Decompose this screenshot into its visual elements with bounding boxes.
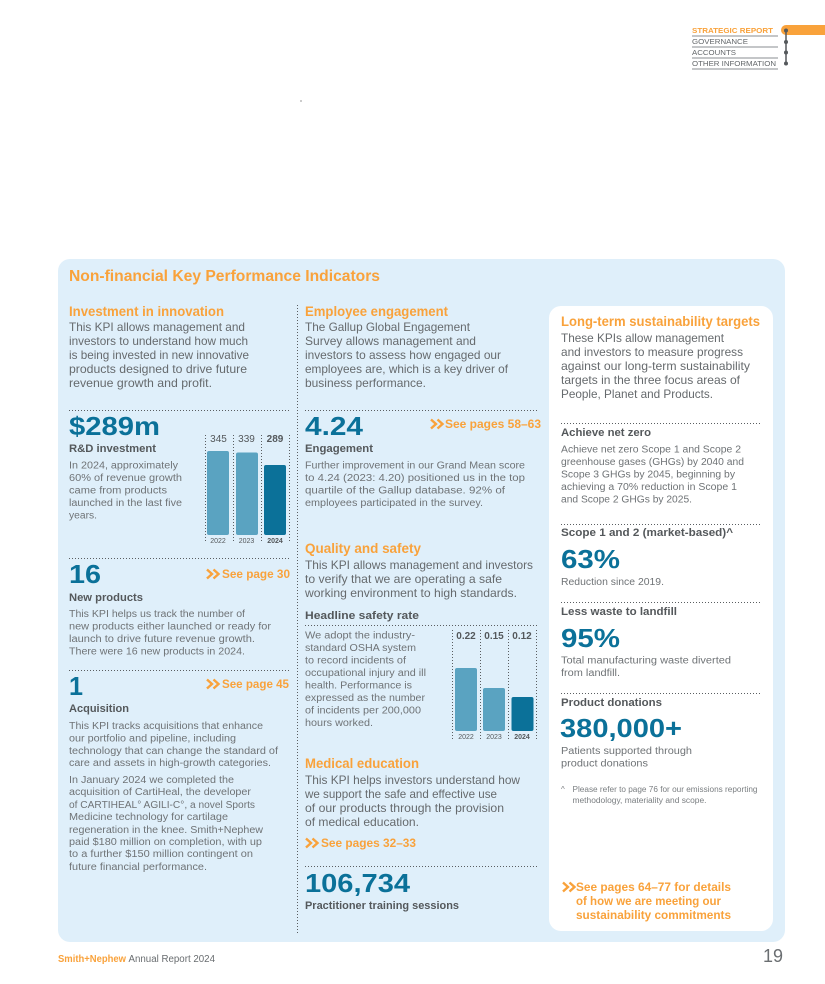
bar chart: R&D investment: 289: [267, 434, 284, 445]
KPI: achieve net zero: Achieve net zero: [561, 427, 651, 439]
KPI: acquisition: our portfolio and pipeline, including: [69, 734, 236, 744]
bar chart: safety rate: 2023: [486, 734, 502, 741]
panel: medical education: of our products through the provision: [305, 801, 504, 815]
panel: employee engagement: [305, 304, 509, 390]
panel: employee engagement: Survey allows management and: [305, 334, 476, 348]
KPI: engagement: to 4.24 (2023: 4.20) positioned us in the top: [305, 473, 525, 484]
KPI: new products: New products: [69, 592, 143, 604]
KPI: scope 1 and 2: Scope 1 and 2 (market-based)^: [561, 527, 734, 539]
KPI: new products: This KPI helps us track the number of: [69, 609, 245, 620]
bar chart: safety rate: 2024: [514, 734, 530, 741]
KPI: new products: There were 16 new products in 2024.: [69, 646, 245, 658]
bar chart: R&D investment: 339: [238, 434, 255, 445]
text: safety rate description: to record incidents of: [305, 656, 406, 666]
panel: quality and safety: working environment to high standards.: [304, 586, 517, 600]
KPI: engagement: Further improvement in our Grand Mean score: [305, 460, 525, 472]
KPI: engagement: Engagement: [305, 443, 373, 455]
KPI: R&D investment: In 2024, approximately: [69, 460, 178, 472]
panel: medical education: Medical education: [305, 756, 419, 771]
KPI: acquisition: regeneration in the knee. Smith+Nephew: [69, 825, 264, 836]
navigation tabs: STRATEGIC REPORT: [692, 26, 773, 35]
bar chart: R&D investment: [206, 434, 290, 545]
text: safety rate description: of incidents per 200,000: [305, 706, 421, 716]
KPI: new products: See page 30: [222, 569, 290, 581]
footer: [58, 954, 215, 965]
KPI: acquisition: acquisition of CartiHeal, the developer: [69, 787, 252, 798]
panel: quality and safety: This KPI allows management and investors: [305, 558, 533, 572]
link: sustainability commitments: of how we are meeting our: [576, 896, 722, 908]
text: safety rate description: standard OSHA system: [305, 643, 416, 654]
panel: employee engagement: Employee engagement: [305, 304, 448, 319]
bar chart: R&D investment: 2022: [210, 538, 226, 545]
KPI: acquisition: future financial performance.: [69, 862, 207, 873]
KPI: R&D investment: launched in the last five: [69, 498, 182, 509]
KPI: achieve net zero: and Scope 2 GHGs by 2025.: [561, 494, 692, 506]
KPI: scope 1 and 2: [561, 527, 734, 588]
text: safety rate description: We adopt the industry-: [305, 630, 415, 642]
text: safety rate description: [305, 630, 426, 729]
KPI: R&D investment: $289m: [69, 411, 160, 441]
panel: medical education: This KPI helps investors understand how: [305, 773, 520, 787]
text: safety rate description: expressed as the number: [305, 693, 426, 704]
text: safety rate description: hours worked.: [305, 718, 373, 729]
text: safety rate description: occupational injury and ill: [305, 668, 426, 679]
panel: investment in innovation: This KPI allows management and: [69, 320, 245, 334]
KPI: engagement: 4.24: [305, 411, 364, 441]
bar chart: safety rate: 0.12: [512, 631, 532, 642]
KPI: less waste to landfill: Total manufacturing waste diverted: [561, 656, 731, 666]
KPI: product donations: product donations: [561, 758, 648, 770]
panel: investment in innovation: [69, 304, 249, 390]
KPI: scope 1 and 2: Reduction since 2019.: [561, 577, 664, 588]
KPI: less waste to landfill: from landfill.: [561, 668, 620, 679]
KPI: acquisition: This KPI tracks acquisitions that enhance: [69, 721, 263, 732]
navigation tabs: OTHER INFORMATION: [692, 59, 776, 68]
KPI: product donations: Patients supported through: [561, 746, 692, 757]
panel: quality and safety: Quality and safety: [305, 541, 421, 556]
KPI: less waste to landfill: Less waste to landfill: [561, 606, 677, 618]
main KPI panel: [58, 259, 785, 942]
bar chart: safety rate: 0.15: [484, 631, 504, 642]
KPI: new products: new products either launched or ready for: [69, 622, 272, 632]
panel: employee engagement: The Gallup Global Engagement: [305, 320, 471, 334]
panel: medical education: of medical education.: [305, 815, 419, 829]
KPI: achieve net zero: greenhouse gases (GHGs) by 2040 and: [561, 457, 744, 468]
page number: 19: [763, 946, 783, 966]
KPI: achieve net zero: Achieve net zero Scope 1 and Scope 2: [561, 444, 741, 456]
KPI: new products: launch to drive future revenue growth.: [69, 634, 255, 645]
KPI: R&D investment: years.: [69, 510, 97, 522]
bar chart: safety rate: 2022: [458, 734, 474, 741]
panel: long-term sustainability targets: [549, 306, 773, 931]
footnote: methodology, materiality and scope.: [572, 796, 706, 805]
KPI: achieve net zero: [561, 427, 744, 506]
KPI: practitioner training sessions: Practitioner training sessions: [305, 900, 459, 912]
link: sustainability commitments: See pages 64–77 for details: [576, 882, 731, 894]
panel: quality and safety: [304, 541, 533, 622]
panel: investment in innovation: investors to understand how much: [69, 334, 248, 348]
bar chart: safety rate: 0.22: [456, 631, 476, 642]
panel: employee engagement: business performance.: [305, 376, 426, 390]
KPI: new products: [69, 559, 290, 658]
KPI: scope 1 and 2: 63%: [561, 544, 620, 574]
KPI: new products: 16: [69, 559, 101, 589]
text: safety rate description: health. Performance is: [305, 680, 412, 692]
KPI: acquisition: to a further $150 million contingent on: [69, 849, 253, 860]
panel heading: Non-financial Key Performance Indicators: [69, 268, 380, 285]
bar chart: R&D investment: 345: [210, 434, 227, 445]
KPI: acquisition: Medicine technology for cartilage: [69, 812, 228, 823]
KPI: practitioner training sessions: [305, 868, 459, 912]
KPI: product donations: [560, 697, 692, 770]
KPI: engagement: employees participated in the survey.: [305, 498, 483, 509]
panel: investment in innovation: Investment in innovation: [69, 304, 224, 319]
KPI: engagement: quartile of the Gallup database. 92% of: [305, 486, 505, 496]
KPI: acquisition: In January 2024 we completed the: [69, 775, 234, 786]
link: sustainability commitments: sustainability commitments: [576, 910, 731, 922]
KPI: product donations: Product donations: [561, 697, 662, 709]
navigation tabs: [692, 25, 825, 69]
KPI: R&D investment: R&D investment: [69, 443, 156, 455]
KPI: engagement: See pages 58–63: [445, 419, 541, 431]
KPI: acquisition: of CARTIHEAL° AGILI-C°, a novel Sports: [69, 800, 255, 811]
panel: quality and safety: to verify that we are operating a safe: [305, 572, 502, 586]
panel: medical education: [304, 756, 520, 850]
panel: long-term sustainability targets: and investors to measure progress: [561, 345, 743, 359]
panel: medical education: See pages 32–33: [321, 838, 416, 850]
panel: medical education: we support the safe and effective use: [304, 787, 497, 801]
KPI: acquisition: care and assets in high-growth categories.: [69, 758, 271, 769]
KPI: product donations: 380,000+: [560, 713, 682, 743]
KPI: less waste to landfill: [561, 606, 731, 679]
panel: employee engagement: investors to assess how engaged our: [305, 348, 501, 362]
navigation tabs: GOVERNANCE: [692, 37, 748, 46]
panel: investment in innovation: is being invested in new innovative: [69, 348, 249, 362]
link: sustainability commitments: [563, 882, 731, 922]
KPI: achieve net zero: achieving a 70% reduction in Scope 1: [561, 482, 737, 493]
footer: Annual Report 2024: [128, 954, 215, 965]
panel: long-term sustainability targets: targets in the three focus areas of: [561, 373, 741, 387]
panel: employee engagement: employees are, which is a key driver of: [305, 362, 509, 376]
footer: Smith+Nephew: [58, 954, 126, 965]
panel: long-term sustainability targets: People, Planet and Products.: [561, 387, 713, 401]
panel: long-term sustainability targets: These KPIs allow management: [561, 331, 725, 345]
KPI: R&D investment: came from products: [69, 486, 167, 496]
KPI: R&D investment: [69, 411, 182, 522]
panel: long-term sustainability targets: Long-term sustainability targets: [561, 314, 760, 329]
KPI: acquisition: [69, 671, 290, 873]
KPI: acquisition: Acquisition: [69, 703, 129, 715]
bar chart: R&D investment: 2023: [239, 538, 254, 545]
KPI: less waste to landfill: 95%: [561, 623, 620, 653]
KPI: engagement: [305, 411, 541, 509]
bar chart: R&D investment: 2024: [267, 538, 283, 545]
navigation tabs: ACCOUNTS: [692, 48, 736, 57]
KPI: acquisition: technology that can change the standard of: [69, 746, 278, 757]
KPI: R&D investment: 60% of revenue growth: [69, 473, 182, 484]
KPI: practitioner training sessions: 106,734: [305, 868, 411, 898]
bar chart: safety rate: [452, 630, 536, 741]
footnote: [561, 785, 758, 805]
KPI: acquisition: 1: [69, 671, 83, 701]
panel: investment in innovation: products designed to drive future: [69, 362, 247, 376]
KPI: acquisition: paid $180 million on completion, with up: [69, 837, 262, 848]
KPI: acquisition: See page 45: [222, 679, 290, 691]
panel: long-term sustainability targets: against our long-term sustainability: [561, 359, 750, 373]
KPI: achieve net zero: Scope 3 GHGs by 2045, beginning by: [561, 470, 735, 480]
panel: quality and safety: Headline safety rate: [305, 610, 419, 622]
footnote: ^: [561, 785, 565, 794]
panel: investment in innovation: revenue growth and profit.: [69, 376, 212, 390]
footnote: Please refer to page 76 for our emissions reporting: [572, 785, 758, 794]
